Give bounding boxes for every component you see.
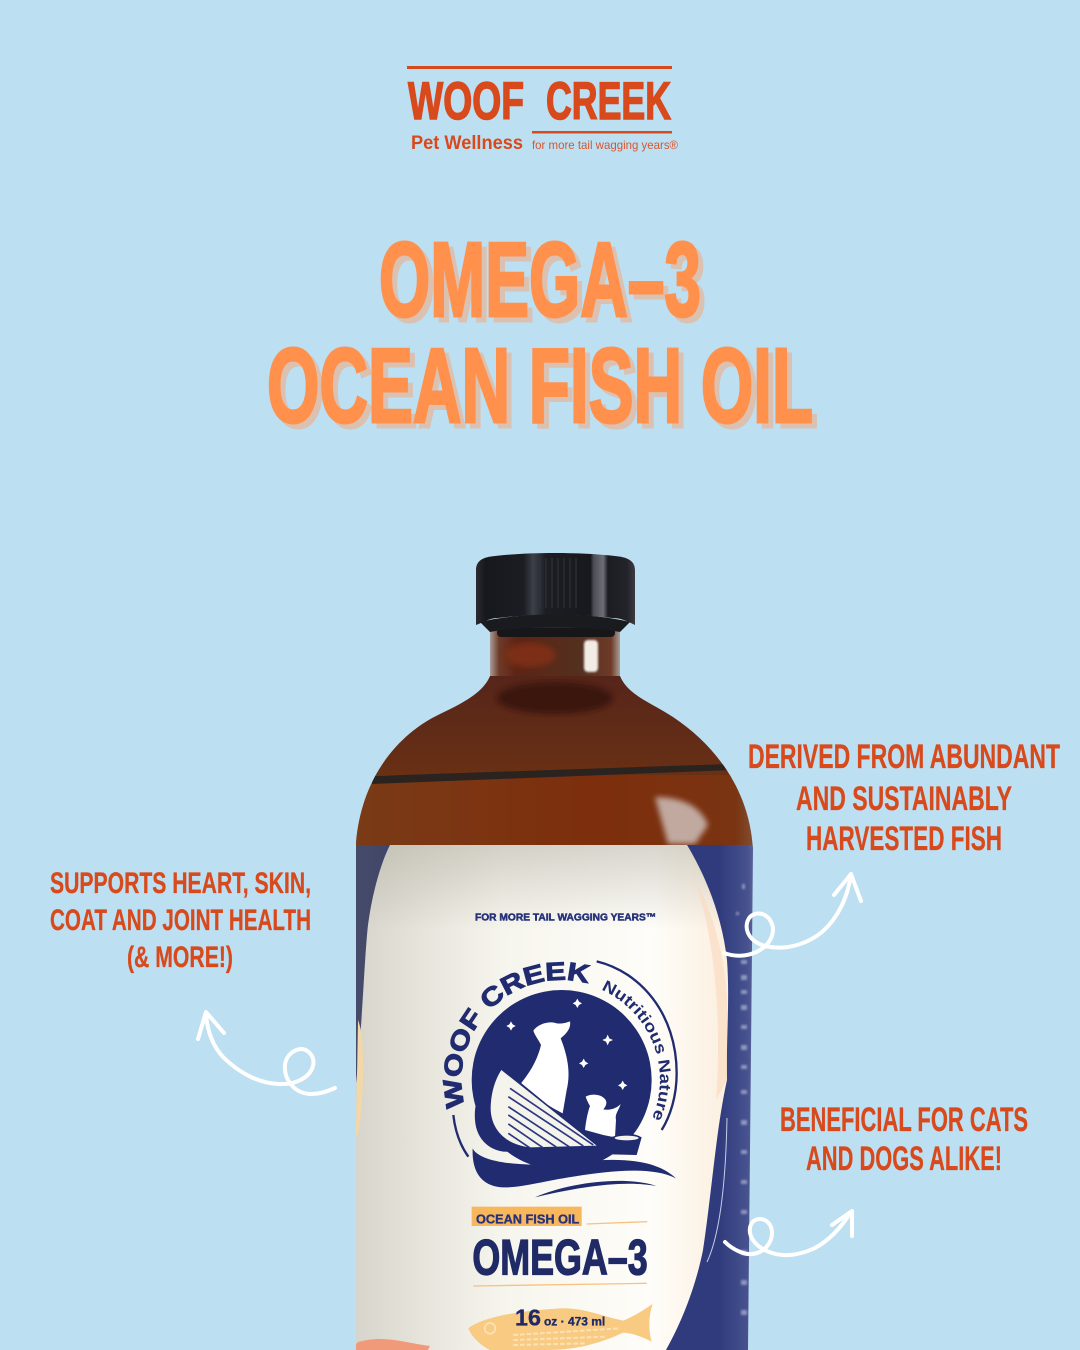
callout: heart, skin, coat and joint health: SUPPORTS HEART, SKIN, (50, 867, 311, 900)
brand emblem: dogs on a boat (442, 960, 678, 1198)
title: Omega-3 Ocean Fish Oil: OMEGA–3 (379, 221, 701, 339)
large dog silhouette (518, 1021, 570, 1113)
brand logo: Woof Creek Pet Wellness: CREEK (546, 72, 671, 131)
boat bow opening (615, 1136, 639, 1140)
product name: OMEGA–3 (472, 1230, 648, 1286)
arrow: bottom right callout (725, 1211, 852, 1255)
label tagline: FOR MORE TAIL WAGGING YEARS™ (475, 913, 656, 924)
emblem motto: Nutritious Nature (602, 980, 671, 1120)
brand logo: Woof Creek Pet Wellness: Pet Wellness (411, 133, 523, 154)
callout: heart, skin, coat and joint health (50, 867, 311, 974)
callout: heart, skin, coat and joint health: (& MORE!) (127, 941, 233, 974)
small dog silhouette (585, 1095, 621, 1137)
product bottle (356, 553, 753, 1350)
night sky circle (472, 990, 652, 1170)
brand logo: Woof Creek Pet Wellness (407, 66, 678, 154)
boat hull (475, 1066, 642, 1155)
volume: oz · 473 ml (544, 1314, 605, 1328)
bottle neck (490, 625, 620, 681)
callout: sustainably harvested fish (748, 738, 1060, 858)
glass shoulder and oil (356, 676, 753, 850)
brand logo: Woof Creek Pet Wellness: WOOF (408, 72, 524, 131)
emblem brand name: WOOF CREEK (442, 962, 592, 1110)
label artwork (442, 913, 678, 1350)
fish illustration (468, 1304, 653, 1350)
title: Omega-3 Ocean Fish Oil (267, 221, 818, 450)
callout: cats and dogs (780, 1101, 1028, 1178)
title: Omega-3 Ocean Fish Oil: OMEGA–3 (384, 226, 706, 344)
callout: heart, skin, coat and joint health: COAT AND JOINT HEALTH (50, 904, 311, 937)
ocean fish oil tag: OCEAN FISH OIL (476, 1212, 580, 1226)
boat planks (491, 1070, 597, 1147)
wrap-around label (350, 845, 760, 1350)
brand logo: Woof Creek Pet Wellness: for more tail wagging years® (532, 138, 678, 152)
black screw cap (476, 553, 635, 632)
stars (506, 999, 627, 1090)
arrow: left callout (198, 1012, 335, 1094)
waves (473, 1148, 676, 1187)
volume: 16 (515, 1304, 541, 1330)
ocean fish oil tag (472, 1207, 647, 1226)
arrow: top right callout (724, 874, 861, 956)
